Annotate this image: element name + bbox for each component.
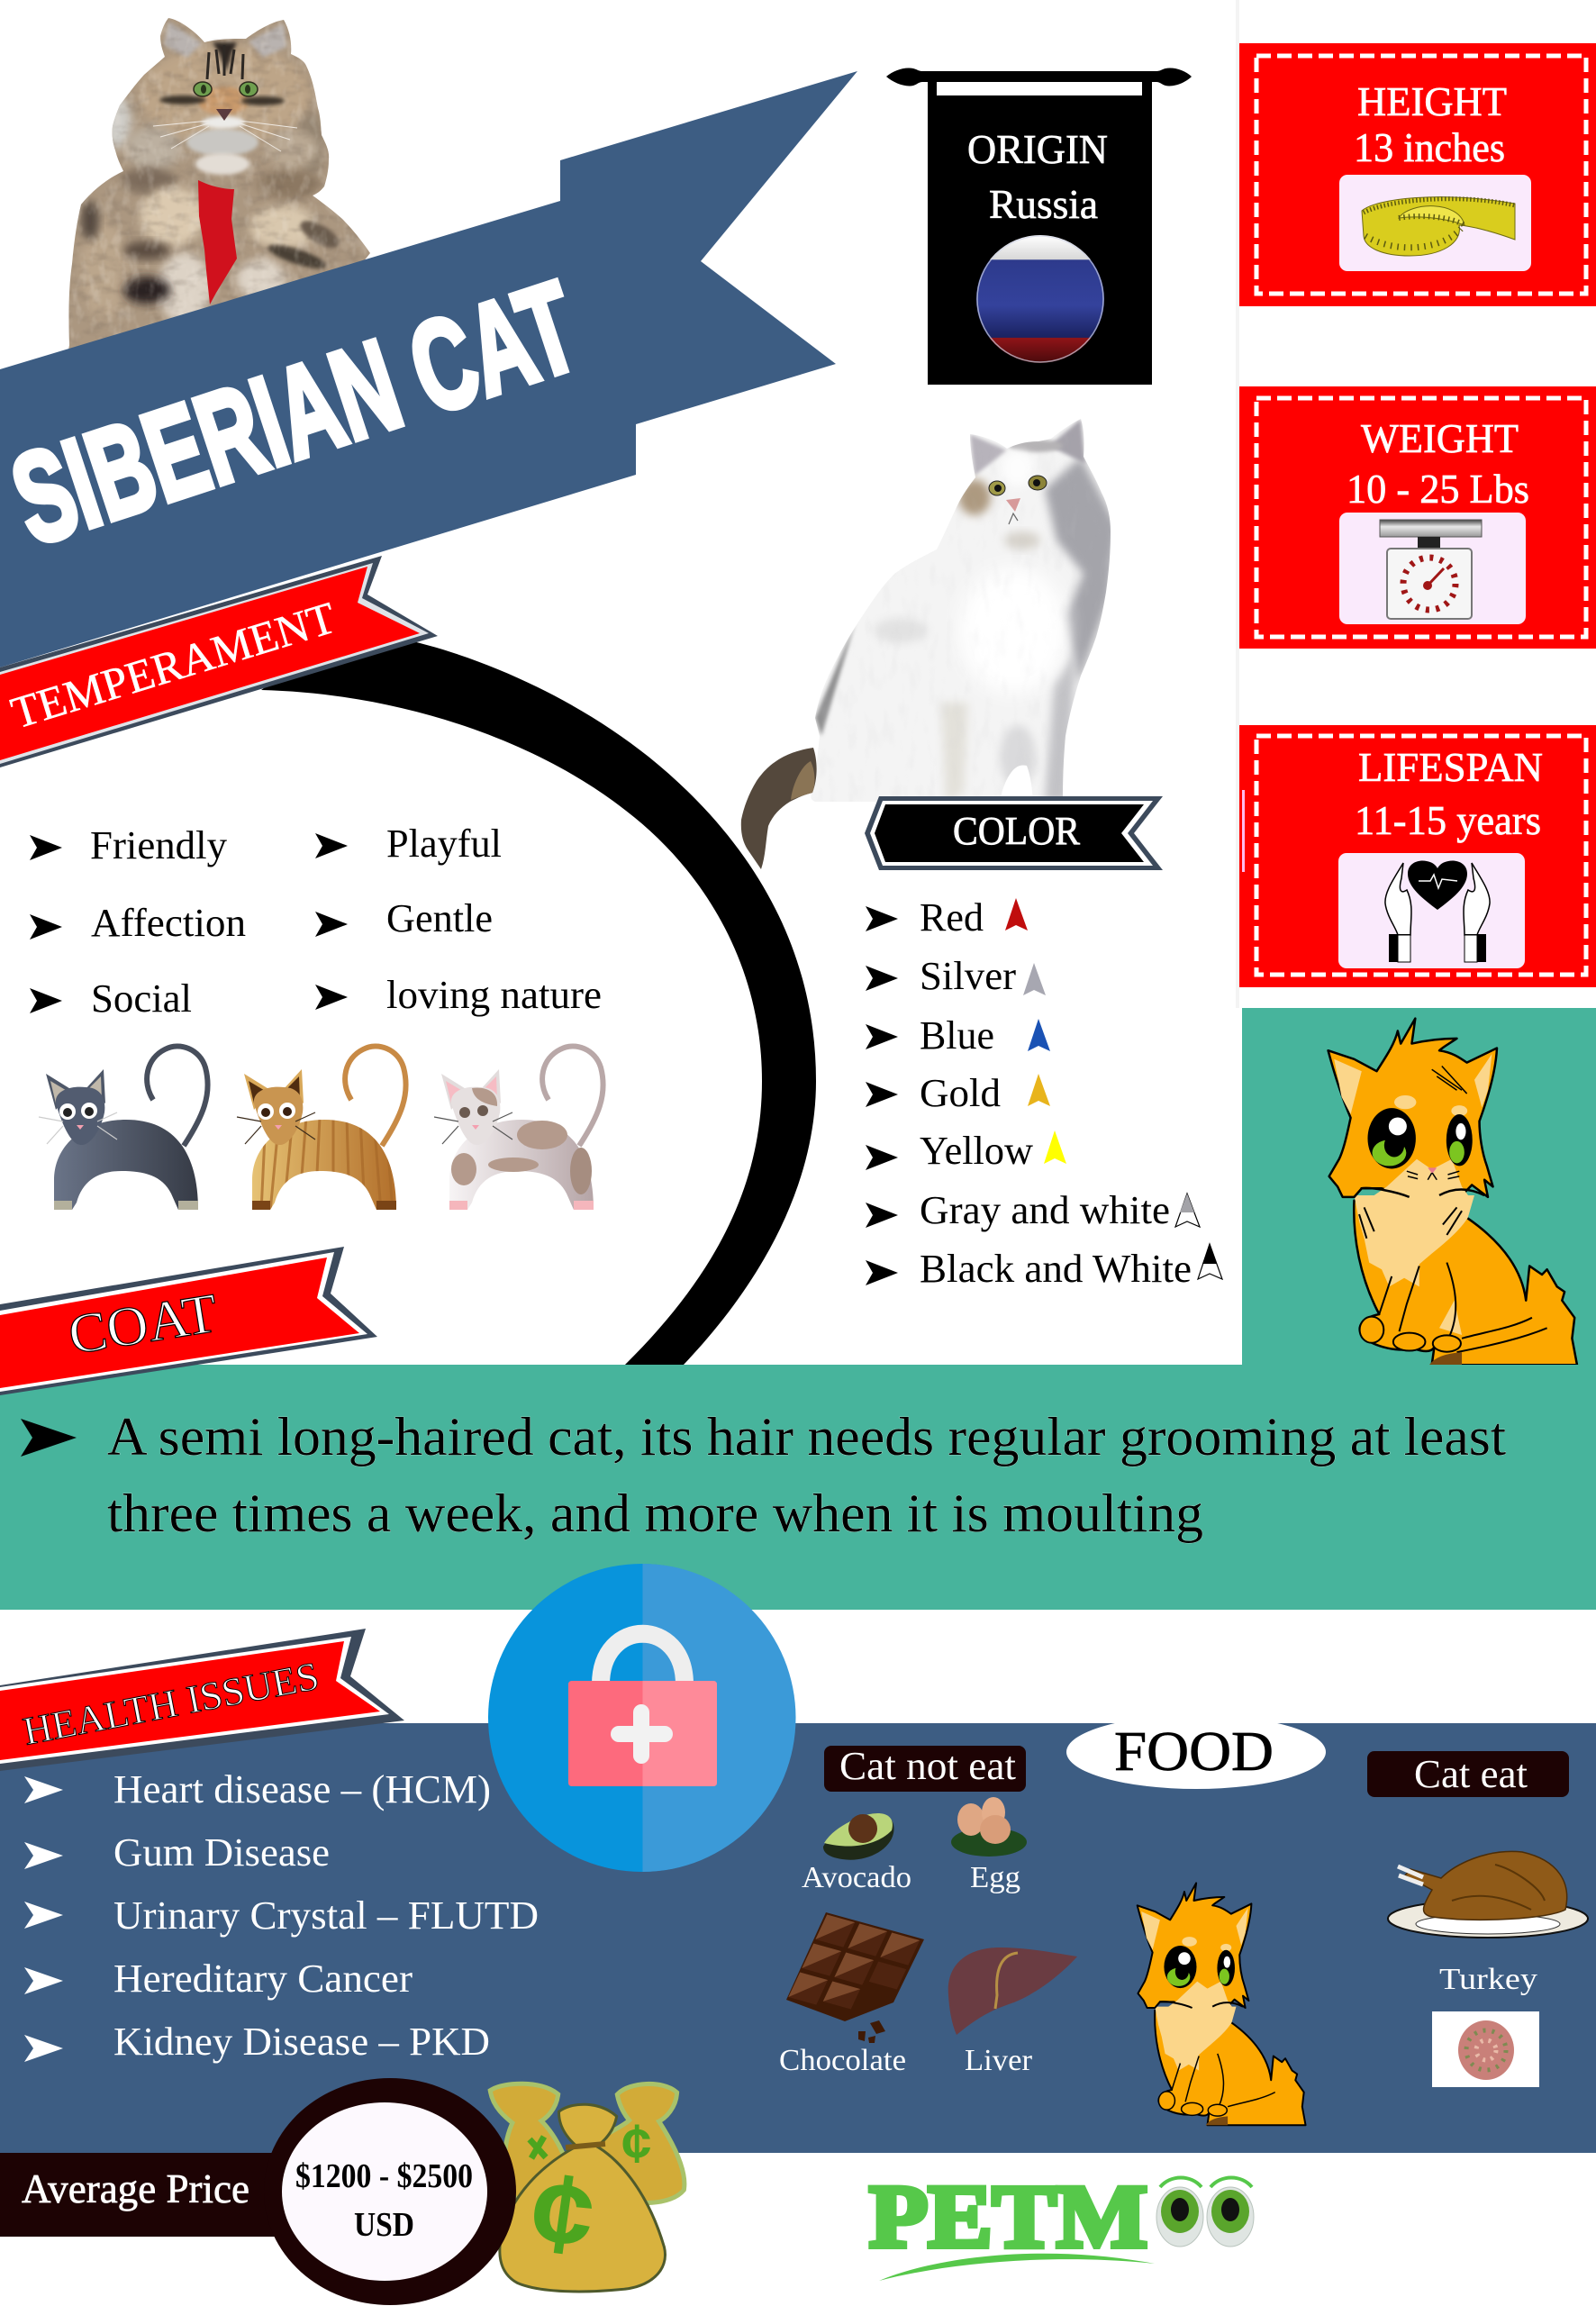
color ribbon bbox=[865, 796, 1163, 870]
item: yellow bbox=[866, 1129, 1066, 1173]
icon: money bags: ¢ bbox=[523, 2148, 603, 2280]
list: colors bbox=[866, 895, 1222, 1291]
item: gold bbox=[866, 1071, 1050, 1115]
panel: height: HEIGHT bbox=[1357, 78, 1507, 124]
item: playful: Playful bbox=[386, 822, 502, 866]
red harness bbox=[198, 180, 237, 304]
item: kidney disease: Kidney Disease – PKD bbox=[113, 2020, 490, 2064]
item: friendly bbox=[30, 823, 227, 867]
food heading: FOOD bbox=[1114, 1721, 1274, 1783]
coat ribbon bbox=[0, 1247, 377, 1395]
item: social bbox=[30, 976, 192, 1021]
item: hereditary cancer: Hereditary Cancer bbox=[113, 1956, 413, 2001]
icon: kibble photo bbox=[1432, 2011, 1539, 2087]
item: silver bbox=[866, 954, 1046, 998]
item: gentle bbox=[315, 896, 493, 940]
temperament ribbon bbox=[0, 556, 438, 767]
cat eat label: Cat eat bbox=[1414, 1752, 1528, 1796]
coat band bbox=[0, 1365, 1596, 1610]
icon: money bags bbox=[493, 2086, 682, 2290]
price banner: USD bbox=[354, 2206, 414, 2244]
icon: orange kitten bbox=[1328, 1019, 1577, 1365]
item: affection bbox=[30, 901, 246, 945]
item: playful bbox=[315, 822, 502, 866]
panel: lifespan bbox=[1239, 725, 1596, 987]
panel: height bbox=[1239, 43, 1596, 306]
coat description text: three times a week, and more when it is moulting bbox=[107, 1484, 1203, 1543]
petmoo logo bbox=[869, 2166, 1254, 2281]
right column shadow edge bbox=[1236, 0, 1239, 1008]
item: blue bbox=[866, 1013, 1050, 1058]
cat not eat label: Cat not eat bbox=[839, 1744, 1016, 1788]
panel: lifespan: 11-15 years bbox=[1355, 797, 1541, 843]
food labels: avoid: Chocolate bbox=[779, 2044, 906, 2077]
black ring behind temperament bbox=[261, 631, 816, 1365]
icon: eggs on grass bbox=[951, 1797, 1027, 1857]
title ribbon bbox=[0, 71, 857, 667]
item: black and white: Black and White bbox=[920, 1247, 1192, 1291]
list: temperament bbox=[30, 822, 602, 1021]
item: red bbox=[866, 895, 1028, 940]
icon: avocado bbox=[823, 1813, 894, 1860]
origin text bbox=[967, 126, 1108, 227]
panel: kitten on teal bbox=[1242, 1008, 1596, 1365]
cat eat label bbox=[1367, 1751, 1569, 1797]
item: affection: Affection bbox=[91, 901, 246, 945]
icon: heart in hands bbox=[1385, 861, 1490, 962]
coat ribbon: COAT bbox=[65, 1283, 222, 1366]
item: red: Red bbox=[920, 895, 984, 940]
gray and white cat photo bbox=[741, 414, 1117, 869]
cat tail bbox=[741, 748, 817, 869]
food labels: avoid bbox=[779, 1861, 1033, 2077]
price banner bbox=[0, 2078, 516, 2305]
fluffy tabby cat photo bbox=[68, 18, 370, 350]
origin hanging banner bbox=[886, 68, 1192, 385]
turkey label: Turkey bbox=[1439, 1963, 1537, 1996]
item: gray and white: Gray and white bbox=[920, 1188, 1170, 1232]
item: blue: Blue bbox=[920, 1013, 994, 1058]
icon: roast turkey bbox=[1388, 1851, 1588, 1938]
icon: liver bbox=[948, 1947, 1077, 2035]
price banner: Average Price bbox=[22, 2165, 249, 2211]
icon: patched cartoon cat bbox=[434, 1047, 603, 1210]
icon: weighing scale bbox=[1380, 520, 1482, 619]
item: silver: Silver bbox=[920, 954, 1016, 998]
icon: medical bag circle bbox=[488, 1564, 796, 1872]
icon: chocolate bar bbox=[786, 1912, 924, 2043]
front bag bbox=[501, 2106, 664, 2290]
panel: weight: WEIGHT bbox=[1361, 415, 1519, 461]
item: heart disease: Heart disease – (HCM) bbox=[113, 1767, 491, 1811]
panel: lifespan: LIFESPAN bbox=[1358, 744, 1543, 790]
item: friendly: Friendly bbox=[90, 823, 227, 867]
panel: health and food background bbox=[0, 1723, 1596, 2153]
food labels: avoid: Liver bbox=[965, 2044, 1033, 2077]
temperament ribbon: TEMPERAMENT bbox=[5, 592, 341, 739]
icon: measuring tape bbox=[1362, 197, 1515, 256]
coat arrow bbox=[21, 1419, 77, 1457]
item: gentle: Gentle bbox=[386, 896, 493, 940]
food heading bbox=[1066, 1715, 1326, 1789]
list: health issues bbox=[24, 1767, 539, 2064]
origin text: Russia bbox=[989, 181, 1098, 227]
panel: weight bbox=[1239, 386, 1596, 649]
forehead stripes bbox=[213, 42, 237, 72]
item: yellow: Yellow bbox=[920, 1129, 1033, 1173]
eyes and nose bbox=[194, 82, 212, 96]
food labels: avoid: Egg bbox=[970, 1861, 1020, 1894]
icon: russian flag ball bbox=[976, 235, 1104, 363]
icon: small orange kitten bbox=[1138, 1883, 1306, 2125]
coat description text bbox=[107, 1407, 1506, 1543]
health issues ribbon: HEALTH ISSUES bbox=[20, 1654, 322, 1754]
item: gum disease: Gum Disease bbox=[113, 1830, 330, 1875]
swoosh bbox=[879, 2254, 1155, 2281]
panel: weight: 10 - 25 Lbs bbox=[1347, 466, 1529, 512]
panel: height: 13 inches bbox=[1354, 124, 1505, 170]
icon: gray cartoon cat bbox=[39, 1047, 208, 1210]
item: gold: Gold bbox=[920, 1071, 1001, 1115]
item: gum disease bbox=[24, 1830, 330, 1875]
logo eyes bbox=[1156, 2178, 1254, 2247]
petmoo logo: PETM bbox=[869, 2166, 1147, 2266]
health issues ribbon bbox=[0, 1629, 404, 1771]
item: social: Social bbox=[91, 976, 192, 1021]
title text: SIBERIAN CAT bbox=[0, 255, 594, 572]
back right bag bbox=[596, 2086, 682, 2201]
back left bag bbox=[493, 2086, 568, 2198]
food labels: avoid: Avocado bbox=[802, 1861, 911, 1894]
color ribbon: COLOR bbox=[953, 809, 1081, 853]
icon: money bags: ¢ bbox=[621, 2113, 651, 2174]
price banner: $1200 - $2500 bbox=[295, 2157, 473, 2195]
item: loving nature: loving nature bbox=[386, 973, 602, 1017]
item: urinary crystal: Urinary Crystal – FLUTD bbox=[113, 1893, 539, 1938]
icon: striped cartoon cat bbox=[237, 1047, 406, 1212]
coat description text: A semi long-haired cat, its hair needs regular grooming at least bbox=[107, 1407, 1506, 1466]
origin text: ORIGIN bbox=[967, 126, 1108, 172]
